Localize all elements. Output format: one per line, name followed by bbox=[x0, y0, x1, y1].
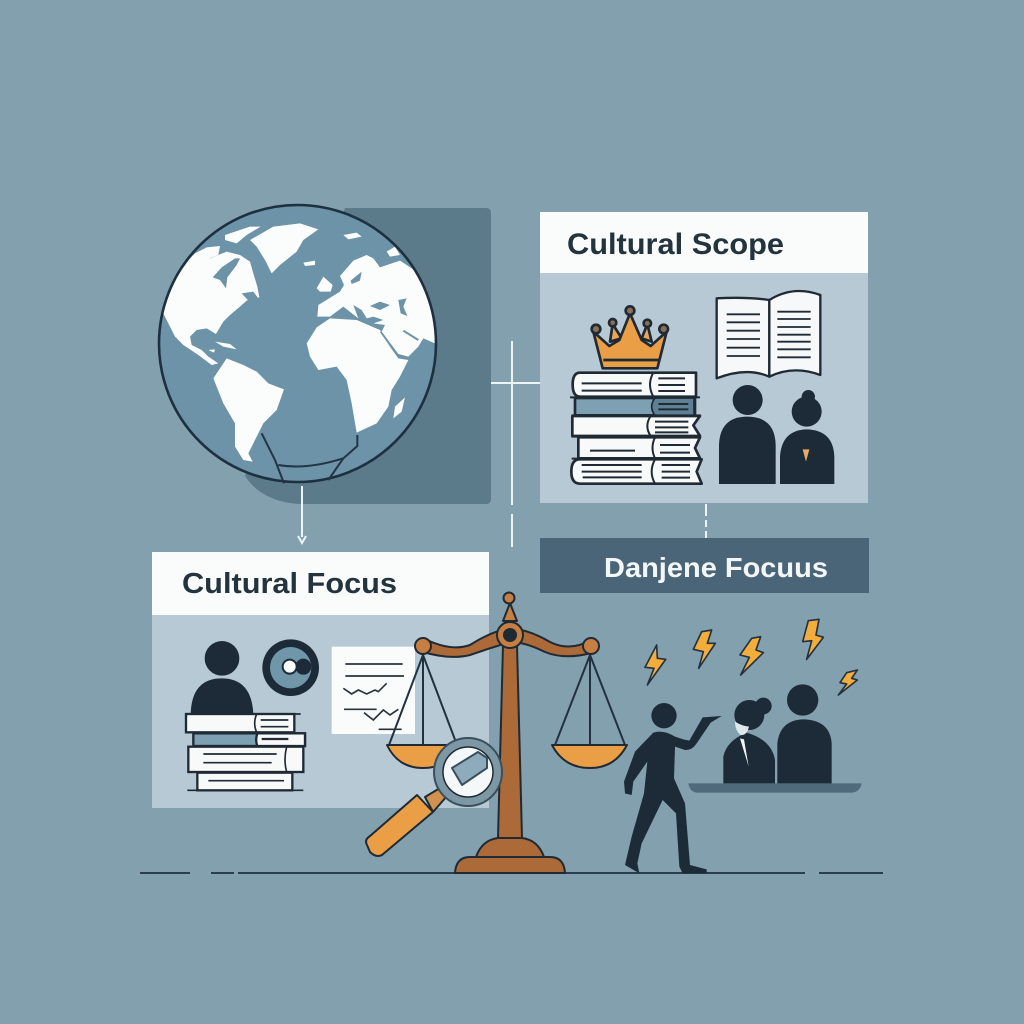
scale beam bbox=[423, 628, 591, 657]
panel: cultural scope bbox=[540, 212, 868, 503]
heading: cultural focus: Cultural Focus bbox=[182, 568, 397, 600]
icon: small book stack bbox=[186, 714, 305, 790]
scale post bbox=[498, 645, 522, 838]
connector lines bbox=[298, 341, 706, 547]
left pan bbox=[387, 745, 459, 768]
icon: eye lens bbox=[262, 639, 319, 696]
icon: open book bbox=[717, 291, 820, 378]
icon: two people bbox=[719, 385, 834, 484]
inland seas bbox=[213, 258, 418, 357]
panel: cultural focus bbox=[152, 552, 489, 808]
continents bbox=[163, 223, 435, 462]
note card bbox=[332, 647, 415, 734]
icon: magnifying glass bbox=[366, 738, 502, 856]
figures: audience on ledge bbox=[688, 684, 862, 793]
scale strings bbox=[389, 655, 625, 745]
heading: cultural scope: Cultural Scope bbox=[567, 228, 784, 261]
icon: person bbox=[191, 641, 253, 714]
icon: crown on books bbox=[592, 306, 668, 368]
globe bbox=[159, 205, 436, 483]
right pan bbox=[552, 745, 627, 768]
scale pivots bbox=[415, 592, 599, 654]
icon: lightning bolts bbox=[645, 619, 857, 695]
label bar: danjene focuus bbox=[540, 538, 869, 593]
label bar: danjene focuus: Danjene Focuus bbox=[604, 552, 828, 583]
scale base bbox=[455, 838, 565, 873]
icon: book stack bbox=[570, 373, 702, 484]
ground line bbox=[140, 872, 883, 874]
globe outline bbox=[159, 205, 436, 482]
antarctic route lines bbox=[262, 433, 357, 483]
figure: gesturing person bbox=[624, 703, 722, 873]
globe shadow panel bbox=[245, 208, 491, 504]
icon: balance scale bbox=[387, 592, 627, 873]
